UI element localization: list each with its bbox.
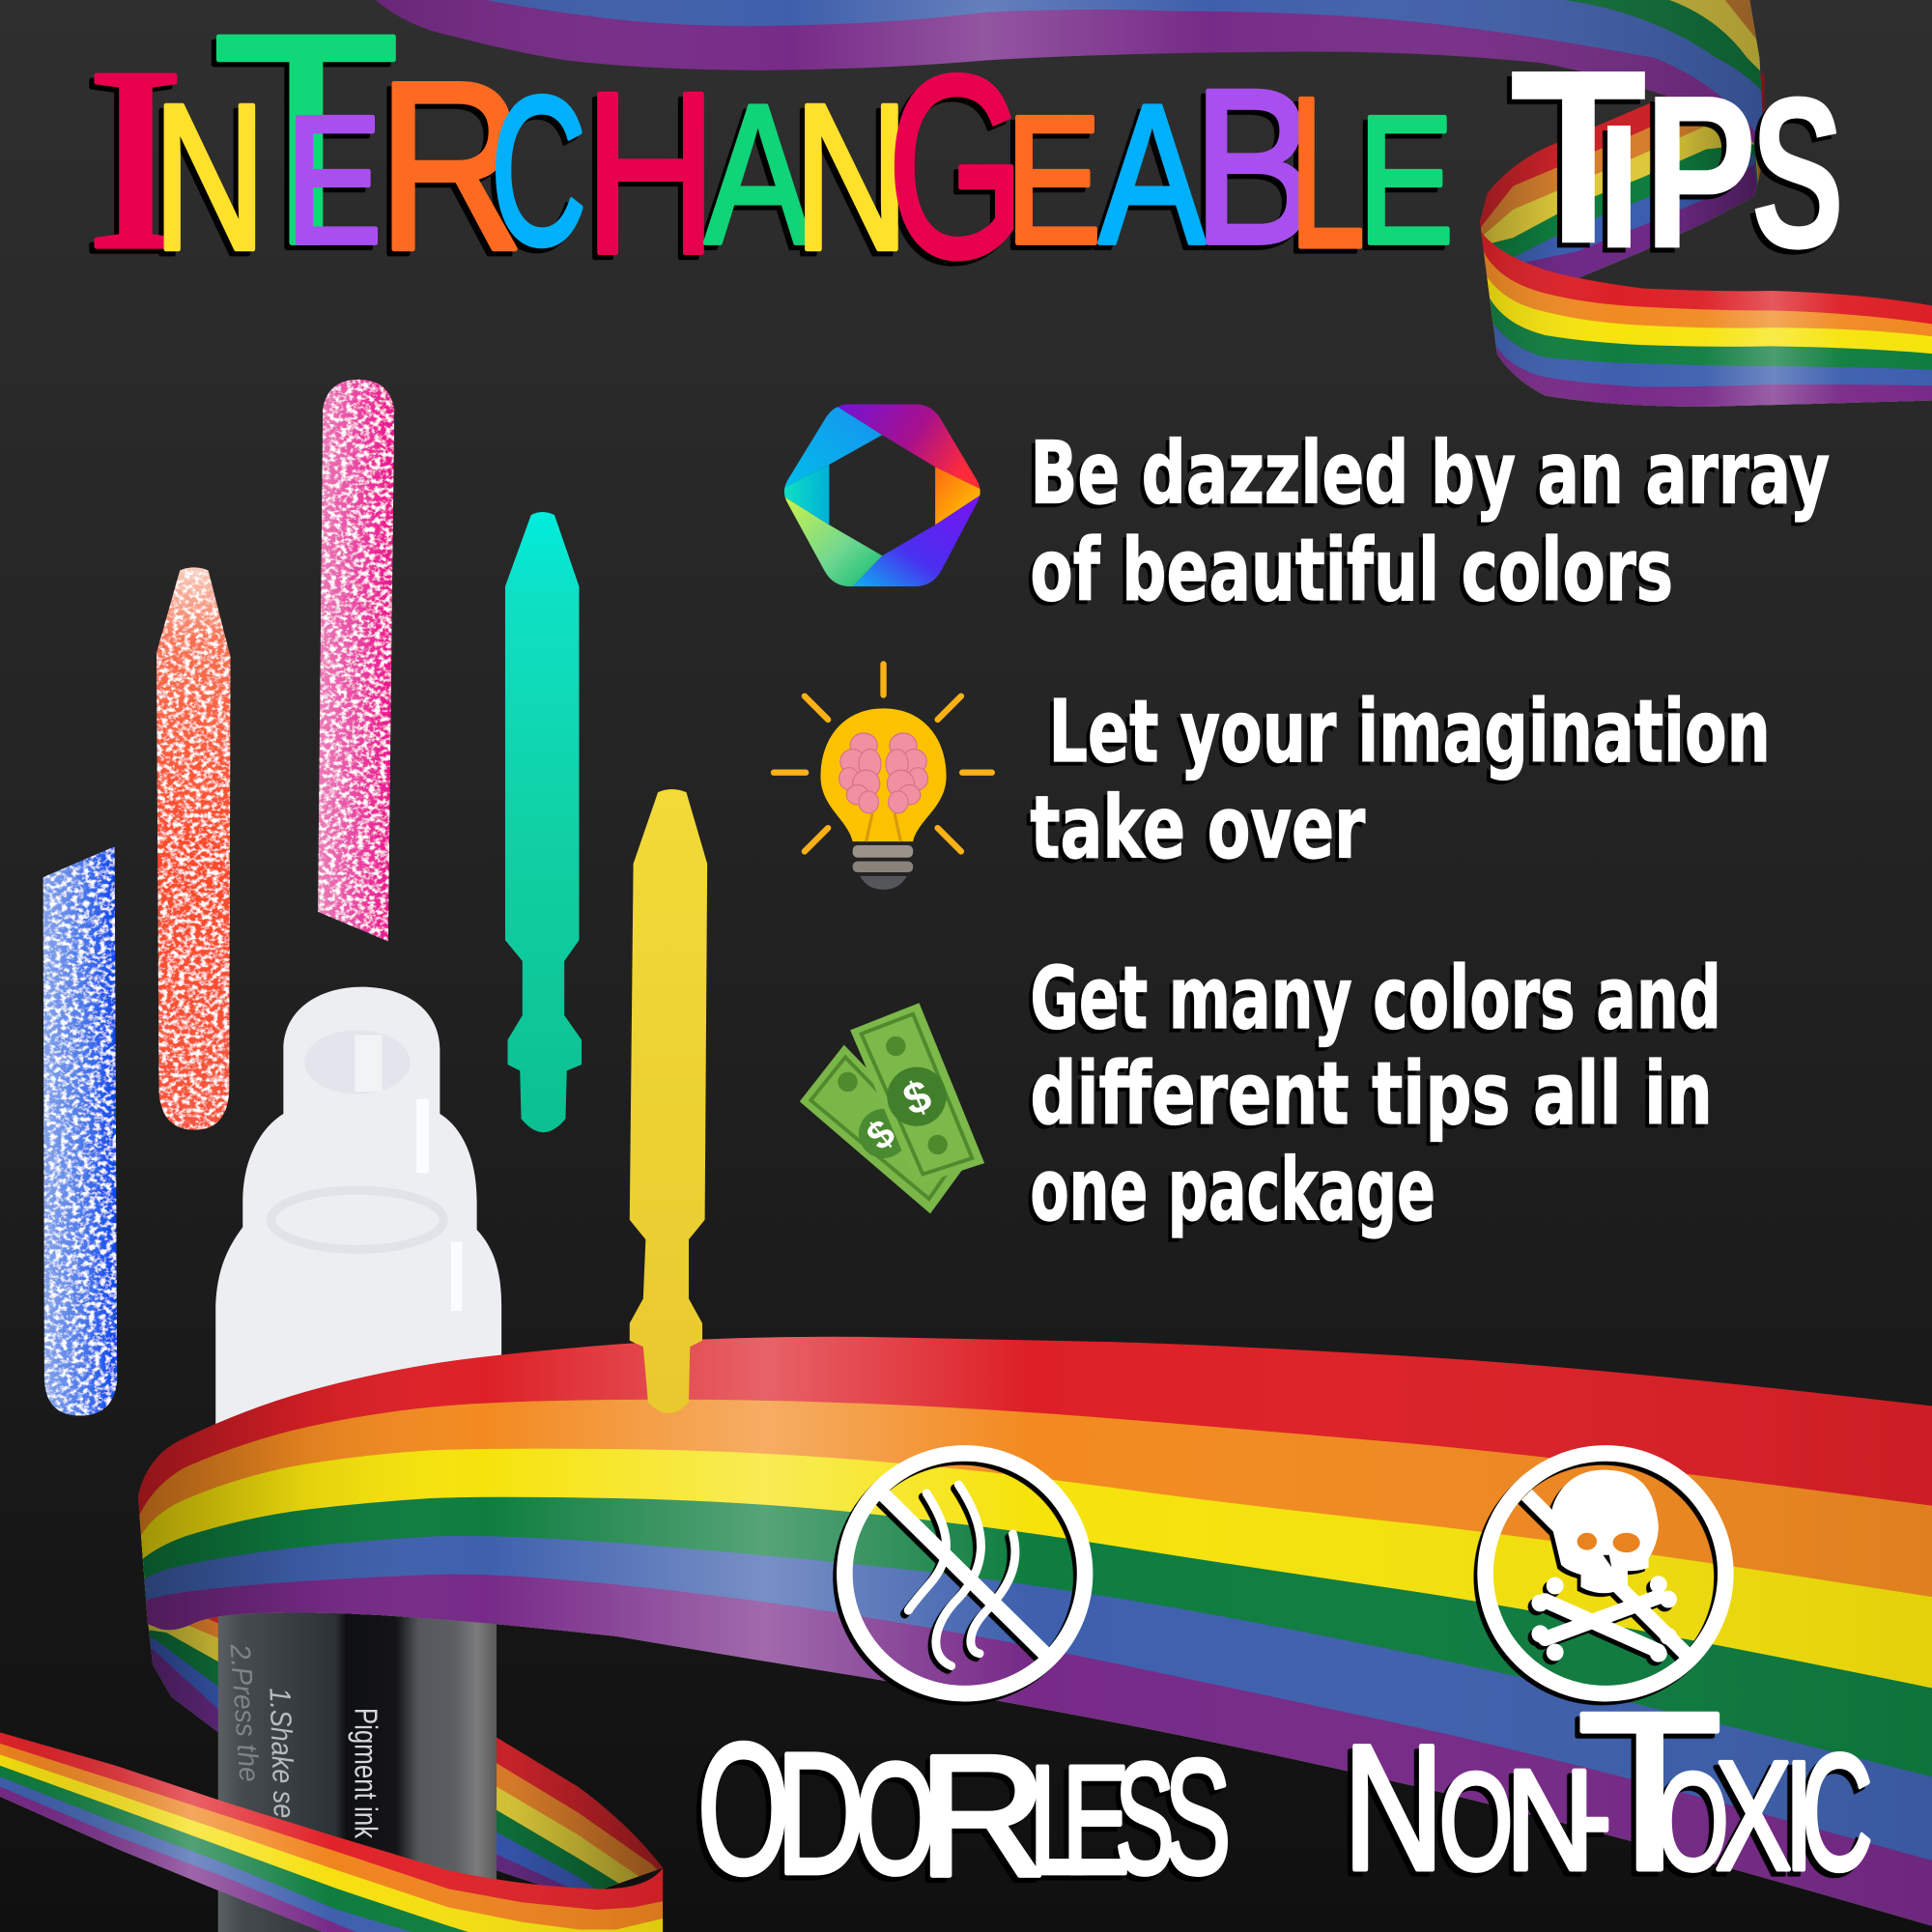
dollar sign: $ (896, 1069, 938, 1125)
title word: Interchangeable: E (1006, 78, 1101, 282)
ribbon: top (376, 0, 1762, 144)
bulb base (853, 845, 913, 890)
ribbon: curl behind Tips heading (1480, 73, 1764, 278)
ribbon: bottom left front (0, 1725, 666, 1932)
title word: Interchangeable: C (491, 53, 586, 290)
label: Odorless: S (1115, 1730, 1175, 1907)
marker pen: white translucent cap (215, 987, 501, 1430)
cap highlight upper (416, 1099, 429, 1173)
title word: Interchangeable: L (1289, 53, 1365, 293)
prohibition slash (884, 1494, 1045, 1654)
title word: Interchangeable: I (86, 14, 185, 303)
brain (839, 733, 927, 813)
label: Non-Toxic: T (1577, 1666, 1722, 1918)
label: Odorless: O (855, 1730, 936, 1907)
title word: Interchangeable: E (1358, 78, 1454, 282)
ribbon: back fold behind pen (149, 1617, 663, 1889)
ribbon: lower right (1481, 232, 1932, 407)
label: Odorless: D (777, 1717, 865, 1910)
tip: teal fine liner (505, 512, 582, 1132)
title word: Tips: S (1750, 51, 1844, 294)
prohibition slash (1526, 1494, 1686, 1654)
icon: light bulb with brain (774, 665, 992, 890)
line two: different tips all in (1030, 1044, 1713, 1145)
ribbon: main wave (124, 1319, 1932, 1932)
text: colors benefit (1030, 423, 1830, 621)
label: Odorless: O (697, 1705, 790, 1913)
label: Non-Toxic: X (1716, 1730, 1792, 1903)
bulb rays (774, 665, 992, 851)
line two: take over (1030, 779, 1365, 879)
title word: Interchangeable: N (793, 61, 909, 294)
text: imagination benefit (1030, 682, 1771, 879)
label: Non-Toxic: - (1575, 1738, 1611, 1889)
label: Non-Toxic: N (1506, 1741, 1595, 1900)
title word: Tips: P (1644, 49, 1757, 295)
tip: red bullet (156, 567, 231, 1130)
skull nose (1603, 1555, 1611, 1567)
back banknote (800, 1045, 963, 1213)
skull eye left (1577, 1533, 1597, 1550)
label: Odorless: E (1062, 1734, 1130, 1906)
tip: yellow fine liner (630, 789, 707, 1413)
label: Non-Toxic: N (1343, 1709, 1444, 1908)
tip: pink chisel (318, 380, 394, 941)
label: Non-Toxic: O (1658, 1746, 1729, 1899)
icon: no toxins skull (1486, 1453, 1725, 1693)
brain stems (867, 813, 900, 841)
icon: money notes (800, 1003, 984, 1213)
crossbones (1531, 1576, 1677, 1662)
pen instructions text: 1.Shake se (263, 1688, 300, 1819)
pen faded instructions text: 2.Press the (223, 1642, 265, 1783)
title word: Interchangeable: E (286, 78, 382, 282)
line two: of beautiful colors (1030, 521, 1673, 621)
label: Odorless: S (1164, 1726, 1231, 1908)
title word: Interchangeable: R (377, 32, 525, 300)
icon: colourful hexagon (777, 402, 985, 589)
dollar sign: $ (858, 1110, 903, 1158)
skull eye right (1613, 1533, 1640, 1552)
title word: Interchangeable: H (584, 43, 717, 301)
title word: Interchangeable: N (153, 61, 267, 294)
title word: Interchangeable: B (1193, 43, 1316, 290)
cap inner channel (355, 1035, 382, 1092)
title word: Tips: I (1597, 87, 1641, 285)
title word: Interchangeable: A (1099, 63, 1205, 285)
icon: no odor (844, 1453, 1085, 1693)
title word: Interchangeable: G (887, 21, 1025, 312)
label: Odorless: R (918, 1719, 1047, 1912)
cap highlight lower (451, 1242, 462, 1311)
marker pen: dark barrel (218, 1589, 497, 1932)
tip: blue chisel (43, 846, 117, 1416)
skull (1551, 1470, 1659, 1593)
title word: Tips: T (1509, 17, 1647, 296)
bulb glass (820, 708, 947, 841)
label: Non-Toxic: O (1439, 1746, 1513, 1899)
front banknote (850, 1003, 984, 1185)
cap shoulder shading (271, 1190, 443, 1249)
label: Non-Toxic: C (1802, 1720, 1873, 1905)
cap opening (304, 1030, 411, 1094)
pen label text: Pigment ink (347, 1708, 383, 1838)
title: Interchangeable Tips (86, 0, 1844, 312)
line three: one package (1030, 1141, 1435, 1241)
title word: Interchangeable: A (705, 63, 810, 285)
label: Non-Toxic: I (1784, 1730, 1814, 1903)
text: value benefit (1030, 949, 1721, 1241)
odor wisps (908, 1485, 1015, 1665)
label: Odorless: L (1029, 1734, 1088, 1906)
